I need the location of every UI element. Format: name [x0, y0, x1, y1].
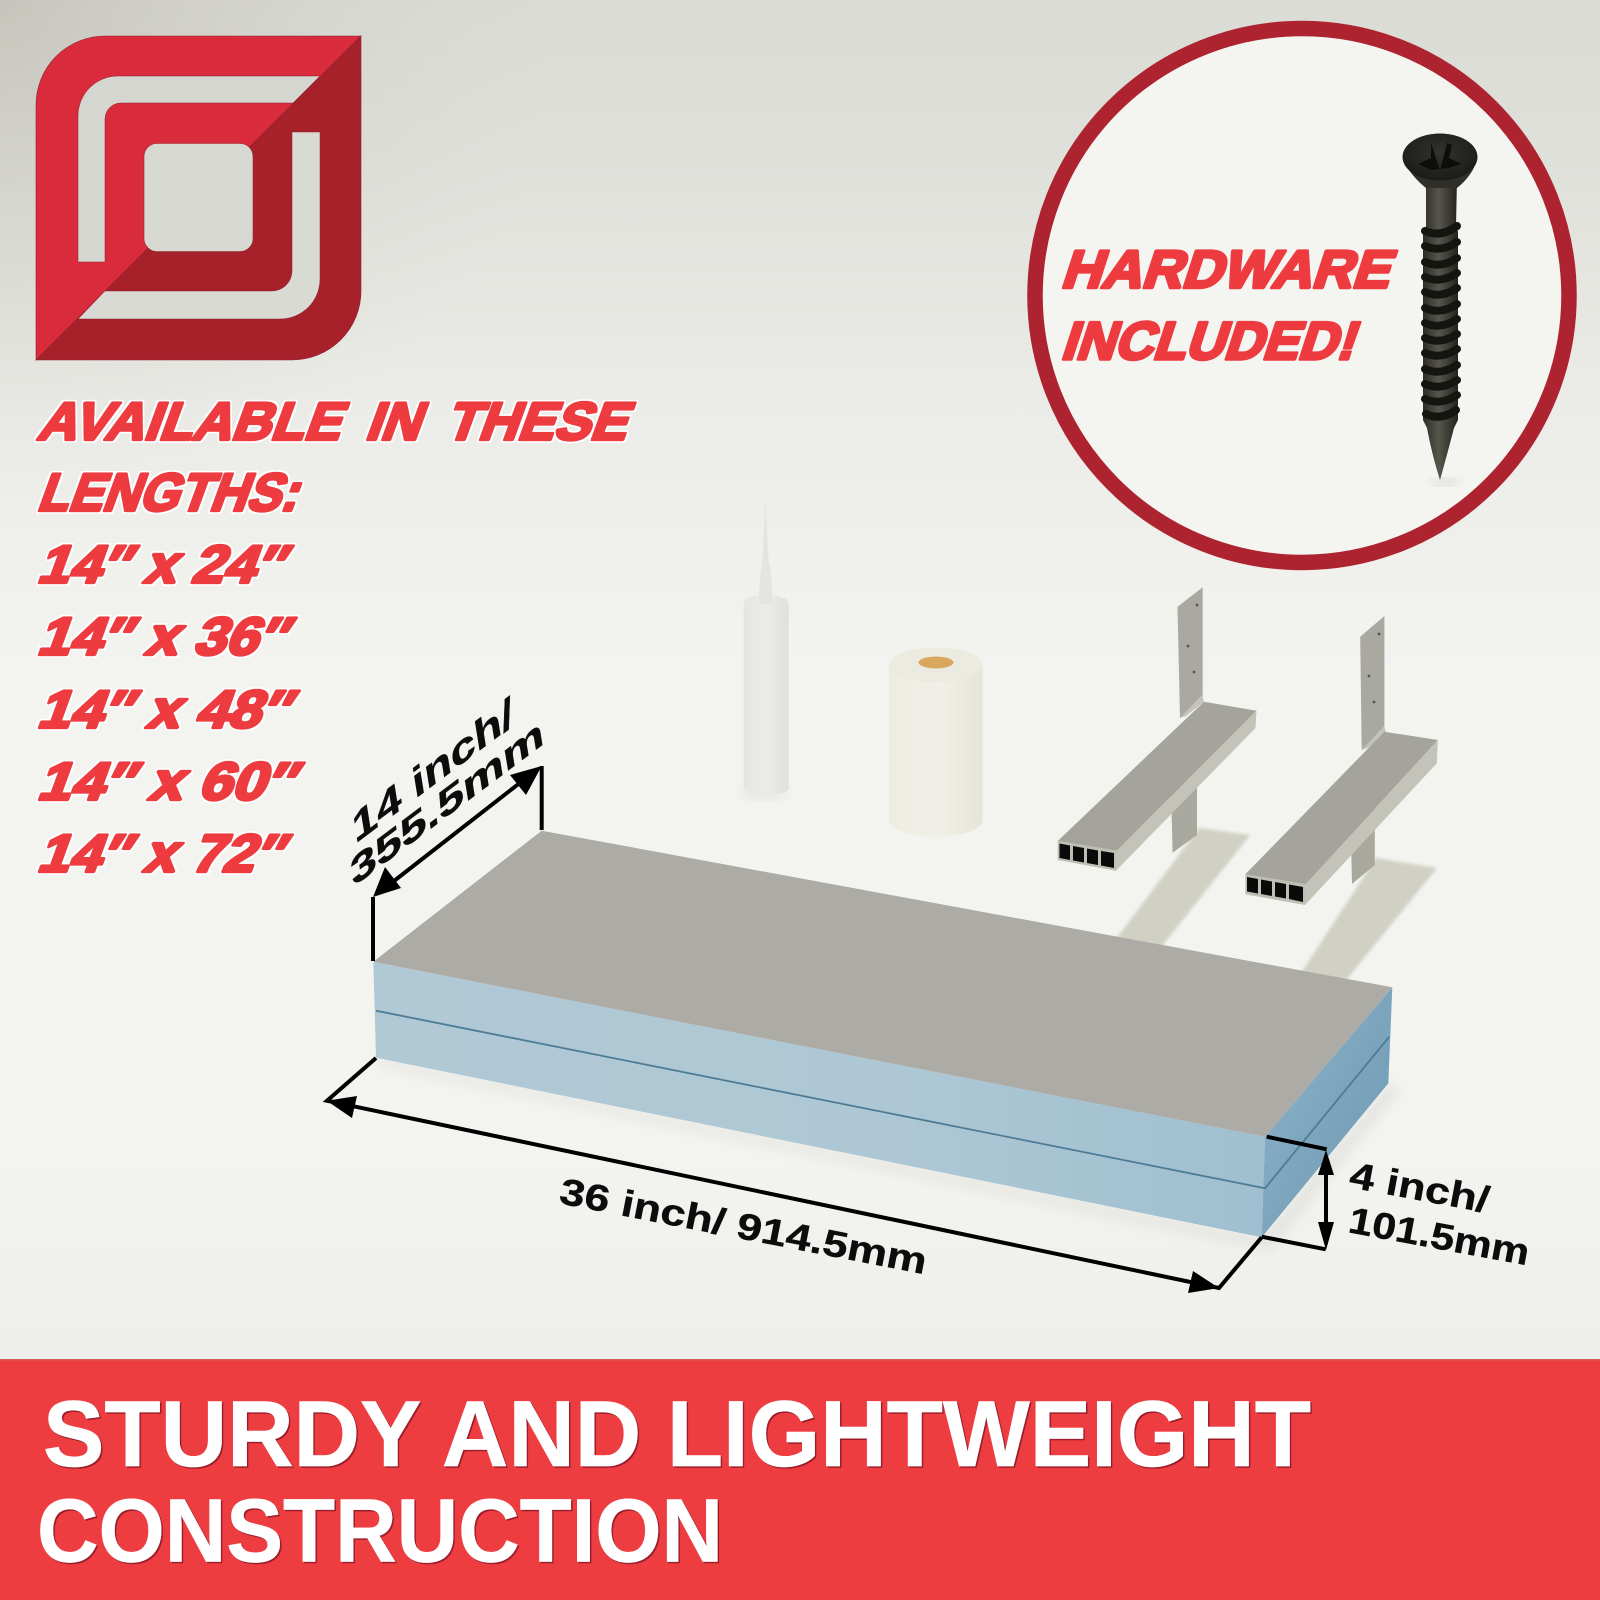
list: available sizes: 14″ x 24″	[32, 534, 299, 594]
list: available sizes: 14″ x 72″	[32, 823, 298, 883]
banner	[0, 1359, 1600, 1600]
thickness label: 4 inch/	[1347, 1155, 1493, 1221]
callout: hardware included	[1035, 28, 1569, 562]
heading: available lengths: LENGTHS:	[32, 462, 314, 522]
banner heading: STURDY AND LIGHTWEIGHT	[43, 1381, 1311, 1486]
icon: left bracket	[1058, 587, 1256, 960]
callout text	[1056, 240, 1404, 371]
dimension: length	[327, 1058, 1262, 1293]
thickness label: 101.5mm	[1346, 1200, 1533, 1273]
list: available sizes: 14″ x 60″	[32, 751, 310, 811]
list: available sizes: 14″ x 36″	[32, 606, 302, 666]
list: available sizes	[32, 534, 310, 883]
width label: 14 inch/	[349, 688, 516, 853]
panel: insulation board	[373, 831, 1400, 1250]
thickness label	[1346, 1155, 1533, 1273]
icon: sealant tube	[740, 498, 789, 800]
list: available sizes: 14″ x 48″	[32, 679, 305, 739]
icon: right bracket	[1245, 616, 1438, 1000]
banner heading	[37, 1381, 1311, 1582]
dimension: width	[348, 688, 546, 961]
width label	[348, 688, 546, 896]
banner heading: CONSTRUCTION	[37, 1482, 723, 1582]
callout text: HARDWARE	[1056, 240, 1404, 299]
icon: screw	[1402, 134, 1478, 486]
side face	[1262, 987, 1392, 1237]
heading: available lengths: AVAILABLE IN THESE	[32, 391, 643, 451]
logo	[36, 36, 361, 360]
callout text: INCLUDED!	[1056, 311, 1369, 371]
icon: adhesive roll	[889, 648, 983, 837]
width label: 355.5mm	[348, 709, 546, 896]
front face	[373, 962, 1265, 1237]
dimension: thickness	[1262, 1137, 1533, 1273]
length label: 36 inch/ 914.5mm	[556, 1171, 930, 1282]
heading: available lengths	[32, 391, 643, 522]
top face	[373, 831, 1392, 1137]
